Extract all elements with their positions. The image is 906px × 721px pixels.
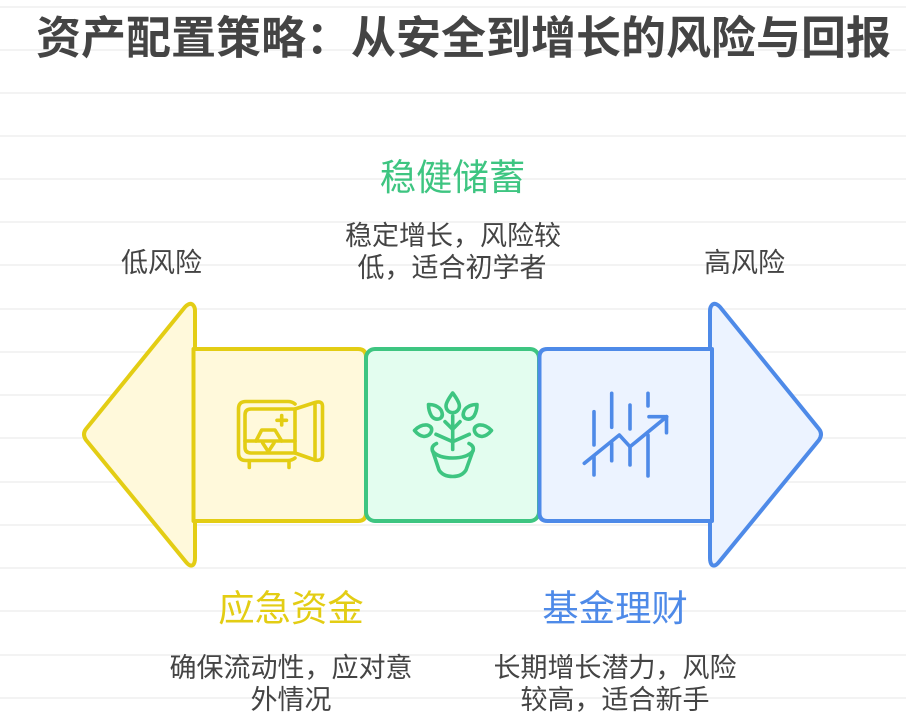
heading: steady savings: 稳健储蓄 [380, 157, 525, 198]
text: steady savings description: 低，适合初学者 [358, 253, 546, 283]
heading: emergency fund: 应急资金 [218, 588, 364, 629]
icon: potted plant [414, 393, 492, 476]
label: low risk: 低风险 [121, 248, 202, 278]
text: steady savings description [345, 221, 561, 283]
text: steady savings description: 稳定增长，风险较 [345, 221, 561, 251]
icon: safe with gem [238, 402, 322, 468]
arrow: high risk right arrowhead [710, 304, 821, 566]
text: long-term funds description [494, 653, 736, 715]
text: emergency fund description: 确保流动性，应对意 [170, 653, 412, 683]
panel: steady savings [366, 349, 539, 521]
panel: emergency fund [194, 349, 366, 521]
text: long-term funds description: 长期增长潜力，风险 [494, 653, 736, 683]
heading: long-term funds: 基金理财 [542, 588, 688, 629]
text: long-term funds description: 较高，适合新手 [520, 685, 710, 715]
arrow: low risk left arrowhead [84, 304, 195, 566]
label: high risk: 高风险 [704, 248, 785, 278]
text: emergency fund description [170, 653, 412, 715]
panel: long-term funds [540, 349, 712, 521]
icon: growth chart [584, 393, 667, 476]
text: emergency fund description: 外情况 [250, 685, 332, 715]
title: 资产配置策略：从安全到增长的风险与回报 [36, 12, 891, 64]
